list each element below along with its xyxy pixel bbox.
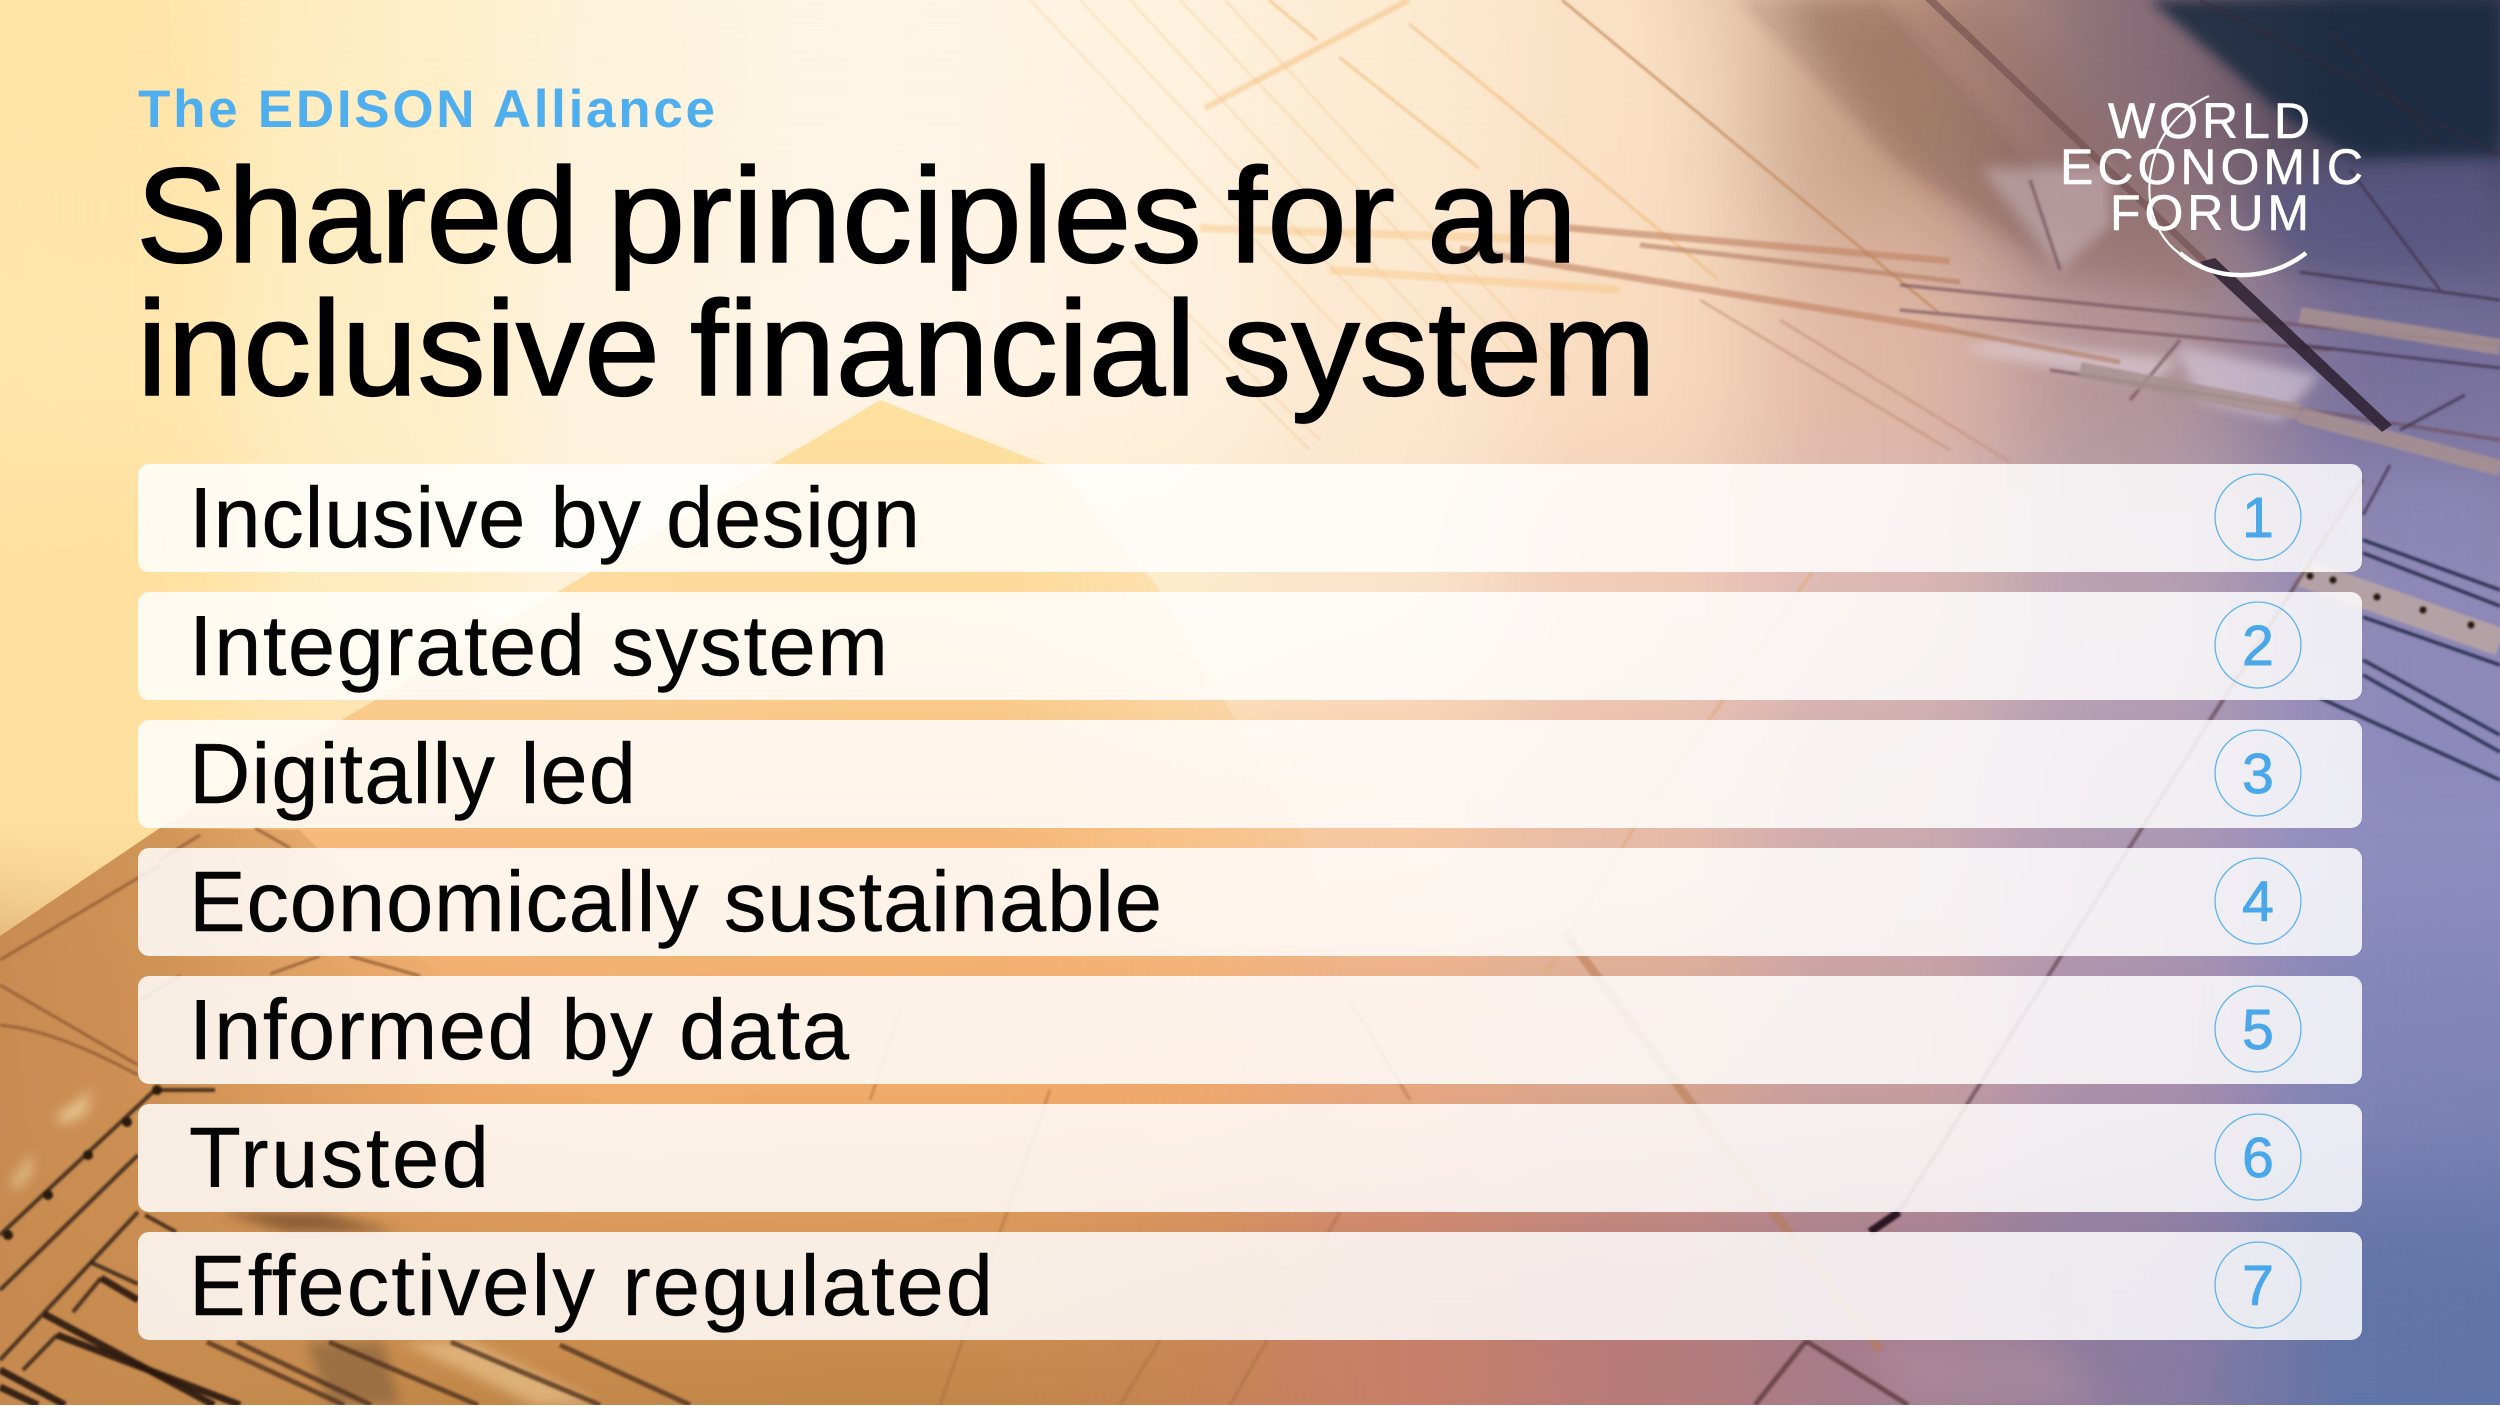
text: Digitally led: Digitally led — [189, 727, 636, 822]
text: Integrated system: Integrated system — [189, 599, 888, 694]
panel: row 4 — [138, 848, 2362, 956]
badge: number 4: 4 — [2242, 870, 2274, 934]
title: system — [1223, 273, 1656, 424]
badge: number 4 — [2215, 858, 2301, 944]
badge: number 7 — [2215, 1242, 2301, 1328]
title — [136, 140, 1656, 424]
logo: World Economic Forum: WORLD — [2108, 93, 2310, 149]
title: an — [1427, 140, 1577, 291]
badge: number 2: 2 — [2242, 614, 2274, 678]
badge: number 3 — [2215, 730, 2301, 816]
panel: row 6 — [138, 1104, 2362, 1212]
panel: row 2 — [138, 592, 2362, 700]
eyebrow heading: The EDISON Alliance — [138, 80, 715, 139]
title: for — [1227, 140, 1395, 291]
title: principles — [607, 140, 1202, 291]
logo: World Economic Forum — [2060, 93, 2363, 275]
badge: number 3: 3 — [2242, 742, 2274, 806]
logo: World Economic Forum: ECONOMIC — [2060, 139, 2363, 195]
panel: row 7 — [138, 1232, 2362, 1340]
text: Effectively regulated: Effectively regulated — [189, 1239, 993, 1334]
panel: row 5 — [138, 976, 2362, 1084]
title: financial — [690, 273, 1196, 424]
badge: number 2 — [2215, 602, 2301, 688]
text: Economically sustainable: Economically sustainable — [189, 855, 1162, 950]
text: Inclusive by design: Inclusive by design — [189, 471, 920, 566]
panel: row 1 — [138, 464, 2362, 572]
badge: number 7: 7 — [2242, 1254, 2274, 1318]
icon: diagonal structural beam — [1925, 0, 2392, 432]
text: Trusted: Trusted — [189, 1111, 489, 1206]
title: Shared — [136, 140, 579, 291]
badge: number 1 — [2215, 474, 2301, 560]
text: Informed by data: Informed by data — [189, 983, 850, 1078]
logo: World Economic Forum: FORUM — [2110, 185, 2309, 241]
panel: row 3 — [138, 720, 2362, 828]
badge: number 1: 1 — [2242, 486, 2274, 550]
badge: number 6: 6 — [2242, 1126, 2274, 1190]
badge: number 5 — [2215, 986, 2301, 1072]
title: inclusive — [137, 273, 660, 424]
badge: number 6 — [2215, 1114, 2301, 1200]
badge: number 5: 5 — [2242, 998, 2274, 1062]
